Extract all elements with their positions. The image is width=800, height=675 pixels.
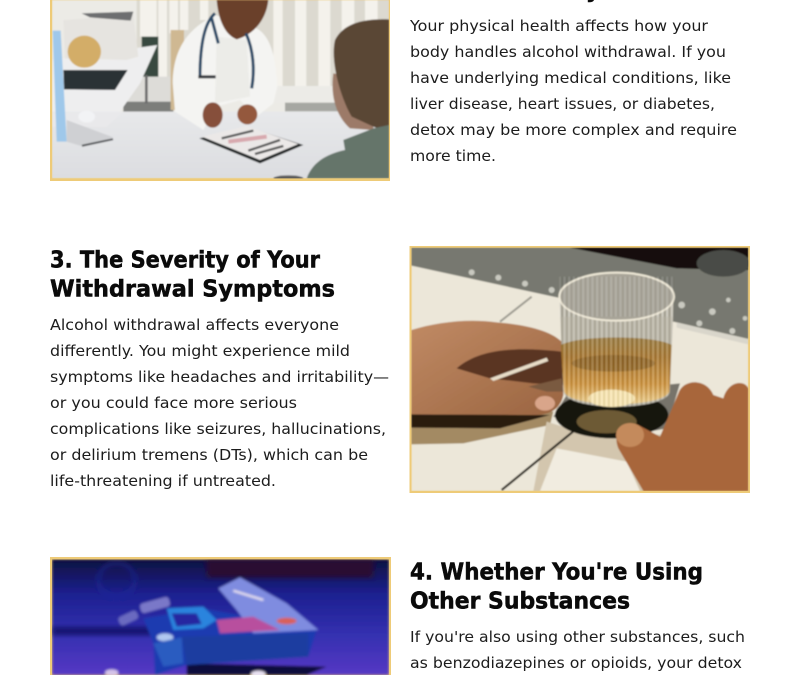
photo: hands holding a glass of whiskey [410,246,750,493]
text block: section 3 body: complications like seizures, hallucinations, [50,420,386,438]
monitor [53,31,67,142]
printer [100,48,138,60]
hands [203,102,223,128]
photo: doctor consulting with patient [50,0,390,181]
text block: section 3 body: or you could face more serious [50,394,297,412]
heading: section 4: Other Substances [410,586,630,614]
heading: section 3: Withdrawal Symptoms [50,274,335,302]
heading: section 3: 3. The Severity of Your [50,246,320,274]
pills [139,596,171,614]
doctor coat [173,15,277,130]
text block: section 3 body: or delirium tremens (DTs), which can be [50,446,368,464]
text block: section 3 body [50,316,389,490]
text block: section 4 body: If you're also using other substances, such [410,628,745,646]
text block: section 2 body: detox may be more complex and require [410,121,737,139]
text block: section 3 body: life-threatening if untreated. [50,472,276,490]
patient shirt [307,125,389,178]
stethoscope [200,13,253,88]
desk [52,112,389,178]
text block: section 2 body: have underlying medical conditions, like [410,69,731,87]
text block: section 3 body: differently. You might experience mild [50,342,350,360]
skull [68,36,101,68]
tile lines [677,322,748,344]
heading: section 3 [50,246,335,302]
left hand [411,321,563,415]
package [143,608,317,675]
glass [559,275,674,407]
text block: section 4 body: as benzodiazepines or opioids, your detox [410,654,742,672]
heading: section 4 [410,558,703,614]
patient skin [332,73,373,130]
text block: section 4 body [410,628,745,672]
text block: section 3 body: symptoms like headaches and irritability— [50,368,389,386]
text block: section 2 body: body handles alcohol withdrawal. If you [410,43,726,61]
tablet [63,70,128,90]
text block: section 2 body: liver disease, heart issues, or diabetes, [410,95,715,113]
text block: section 3 body: Alcohol withdrawal affects everyone [50,316,339,334]
heading: section 4: 4. Whether You're Using [410,558,703,586]
chair [171,30,184,110]
left counter [52,45,157,113]
metal counter [411,248,748,339]
patient hair [334,19,389,133]
coaster [553,383,680,438]
plastic bag [218,577,318,633]
pills foreground [105,669,118,675]
face [217,0,268,39]
keyboard [67,120,113,147]
text block: section 2 body: Your physical health affects how your [409,17,709,35]
right hand [616,382,748,491]
shadow on table [411,412,553,444]
clipboard [199,135,304,164]
shadow under package [187,663,327,675]
text block: section 2 body [409,17,737,165]
text block: section 2 body: more time. [410,147,496,165]
photo: substances under blue light [50,557,391,675]
